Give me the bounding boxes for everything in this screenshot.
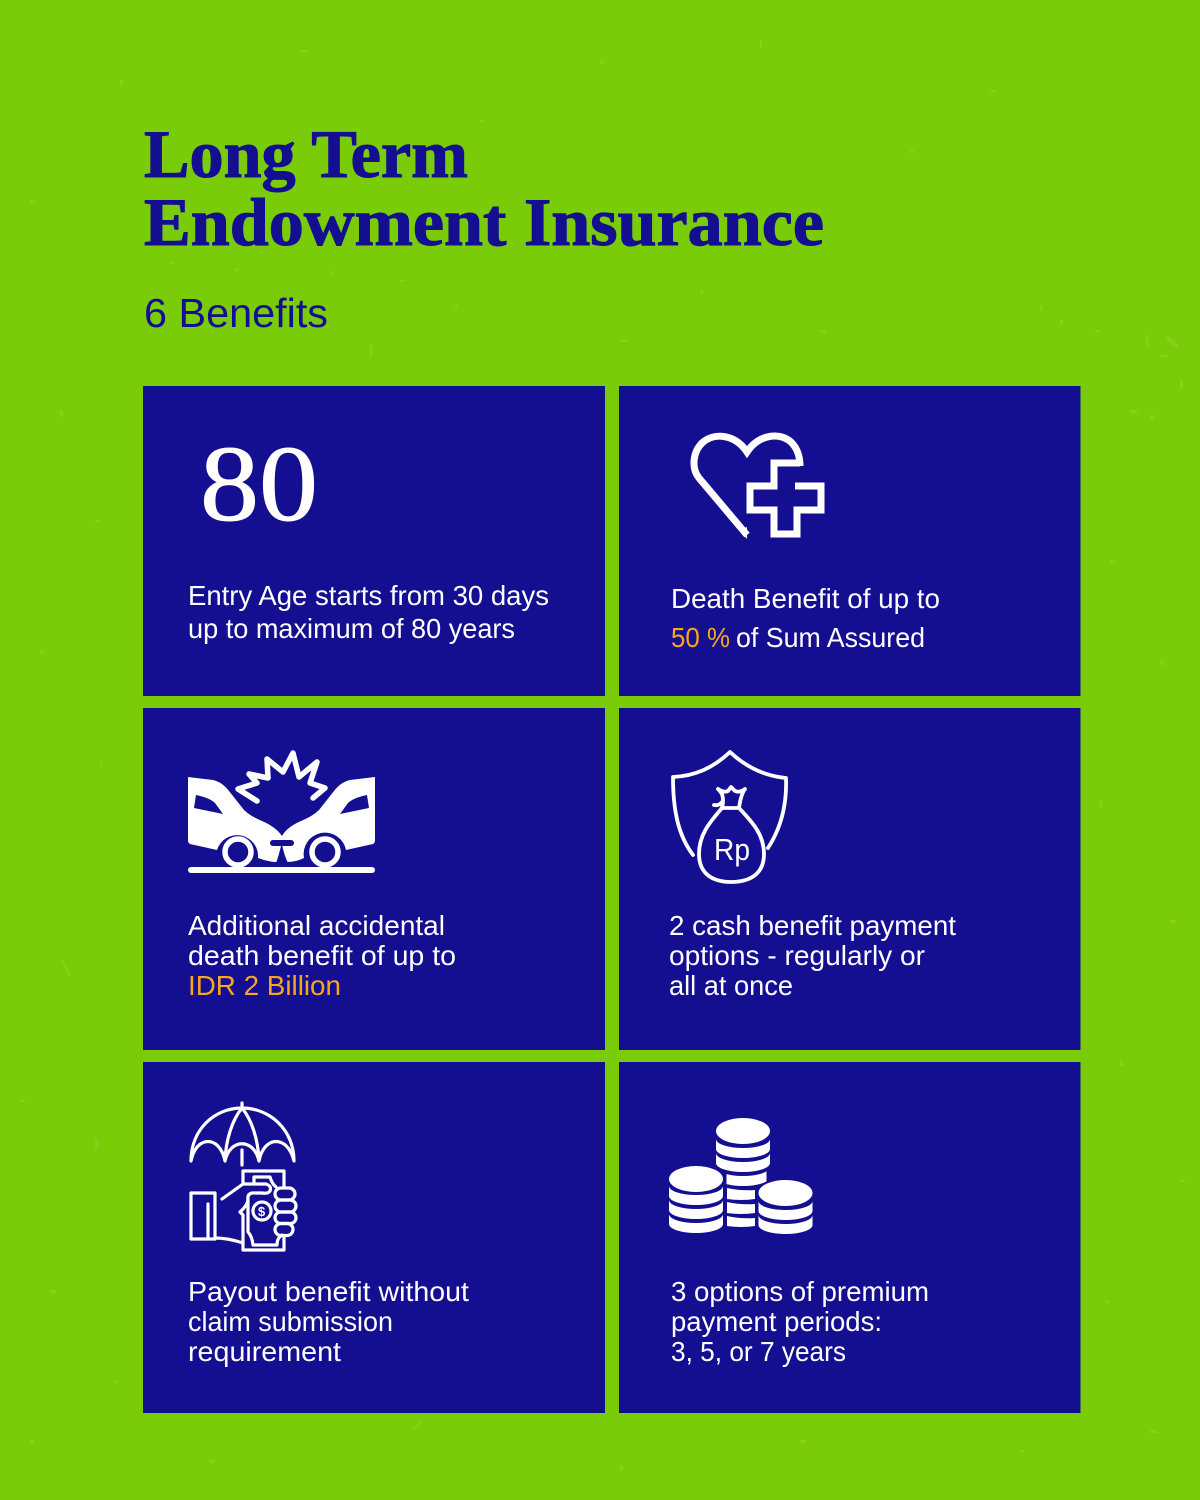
text: cash options: options - regularly or [669, 940, 925, 971]
title: Long Term [144, 116, 468, 192]
panel: death benefit [619, 386, 1080, 696]
text: death benefit: of Sum Assured [736, 622, 925, 653]
panel: entry age [143, 386, 605, 696]
title: Endowment Insurance [144, 184, 824, 260]
text: payout [188, 1276, 469, 1367]
text: death benefit [671, 583, 940, 653]
text: premium periods: payment periods: [671, 1306, 882, 1337]
icon: shield with money bag [673, 752, 786, 882]
text: premium periods: 3 options of premium [671, 1276, 929, 1307]
subtitle: 6 Benefits [144, 290, 328, 336]
text: entry age: Entry Age starts from 30 days [188, 580, 549, 611]
text: accidental death [188, 910, 456, 1001]
text: premium periods [671, 1276, 929, 1367]
text: premium periods: 3, 5, or 7 years [671, 1336, 846, 1367]
icon: coin stacks [669, 1118, 812, 1234]
text: cash options: 2 cash benefit payment [669, 910, 956, 941]
icon: umbrella and hand with money: $ [258, 1204, 266, 1219]
text: payout: Payout benefit without [188, 1276, 469, 1307]
panel: premium periods [619, 1062, 1080, 1413]
text: payout: claim submission [188, 1306, 393, 1337]
icon: car crash [188, 753, 375, 873]
text: accidental death: death benefit of up to [188, 940, 456, 971]
text: cash options [669, 910, 956, 1001]
number: 80: 80 [200, 425, 318, 544]
icon: umbrella and hand with money [191, 1103, 296, 1250]
panel: accidental death [143, 708, 605, 1050]
text: Rp: Rp [714, 832, 750, 867]
text: accidental death: Additional accidental [188, 910, 445, 941]
icon: heart with cross [694, 436, 821, 539]
text: cash options: all at once [669, 970, 793, 1001]
text: payout: requirement [188, 1336, 341, 1367]
text: entry age: up to maximum of 80 years [188, 613, 515, 644]
panel: payout [143, 1062, 605, 1413]
text: death benefit: Death Benefit of up to [671, 583, 940, 614]
title [144, 116, 824, 260]
text: entry age [188, 580, 549, 644]
panel: cash options [619, 708, 1080, 1050]
text: accidental death: IDR 2 Billion [188, 970, 341, 1001]
text: death benefit: 50 % [671, 622, 730, 653]
